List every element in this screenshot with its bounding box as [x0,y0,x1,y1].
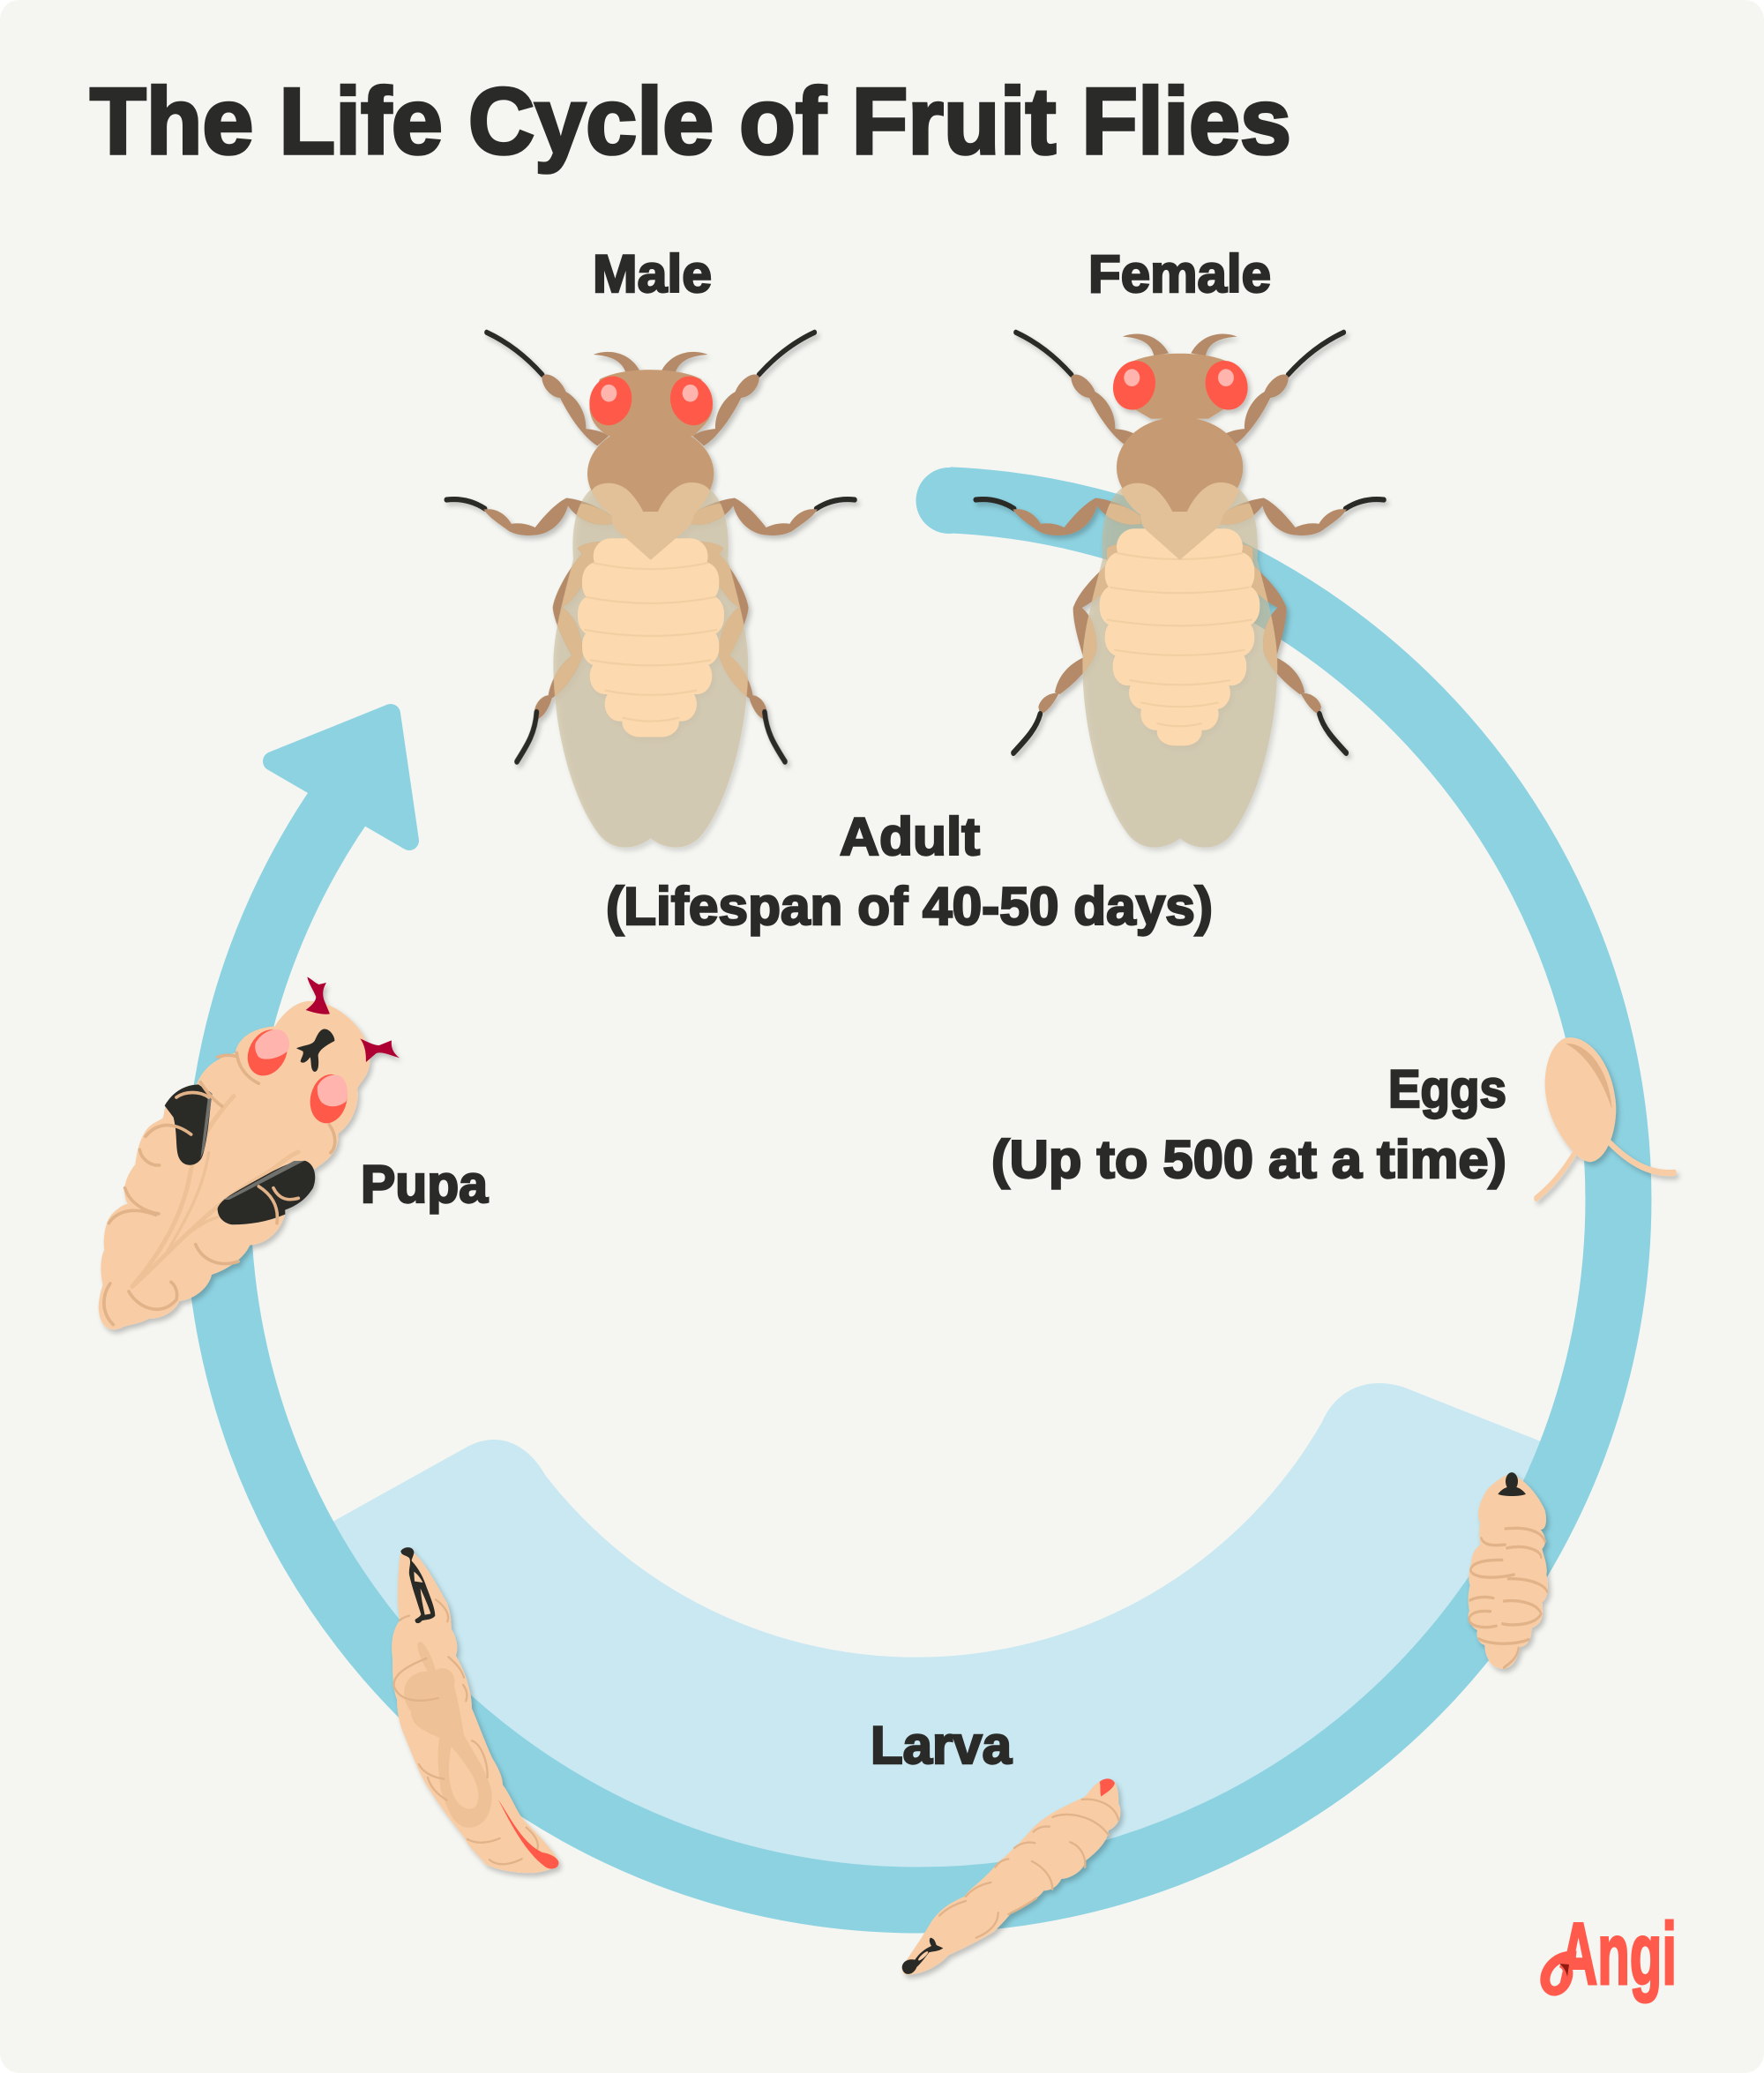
male eyes [582,367,720,435]
female abdomen [1100,528,1259,745]
logo: Angi: Angi [1559,1905,1677,2002]
logo: Angi [1545,1905,1677,2002]
label: female: Female [1088,244,1271,303]
illustration: male fruit fly [446,333,855,848]
pupa antennae [306,977,400,1062]
arrow head [273,714,409,841]
male abdomen [578,538,724,737]
male head [589,370,713,436]
female wings [1082,488,1282,852]
larva stage highlight band [310,1383,1562,1891]
label: larva: Larva [871,1716,1013,1775]
pupa eyes [240,1022,352,1126]
larva mouth highlights [414,1572,430,1615]
label: male: Male [593,244,712,303]
illustration: egg [1536,1037,1674,1198]
pupa left wing [165,1084,213,1165]
pupa folds [104,1052,335,1325]
male wings [549,485,753,848]
female wing base [1121,483,1239,560]
illustration: first larva [1469,1472,1548,1669]
illustration: pupa [99,977,400,1329]
female head [1129,354,1232,419]
label: eggs count: (Up to 500 at a time) [991,1130,1506,1189]
pupa veins [132,1096,298,1286]
ring start cap [916,468,983,534]
larva mouth highlight [917,1950,929,1962]
pupa mouthparts [296,1029,334,1072]
label: adult lifespan: (Lifespan of 40-50 days) [606,877,1213,936]
logo loop [1545,1956,1576,1991]
title: The Life Cycle of Fruit Flies [90,68,1291,174]
female eyes [1106,351,1255,419]
logo loop shadow [1559,1964,1569,1977]
pupa right wing [218,1161,315,1224]
female legs [975,333,1384,753]
male wing base [592,483,710,560]
label: adult: Adult [840,807,980,866]
male legs [446,333,855,761]
illustration: third larva [392,1547,559,1873]
illustration: female fruit fly [975,333,1384,848]
label: pupa: Pupa [361,1155,489,1214]
life cycle ring with arrow [218,468,1618,1900]
female thorax [1117,417,1243,518]
male thorax [587,425,714,522]
illustration: second larva [902,1778,1121,1975]
label: eggs: Eggs [1388,1059,1506,1119]
